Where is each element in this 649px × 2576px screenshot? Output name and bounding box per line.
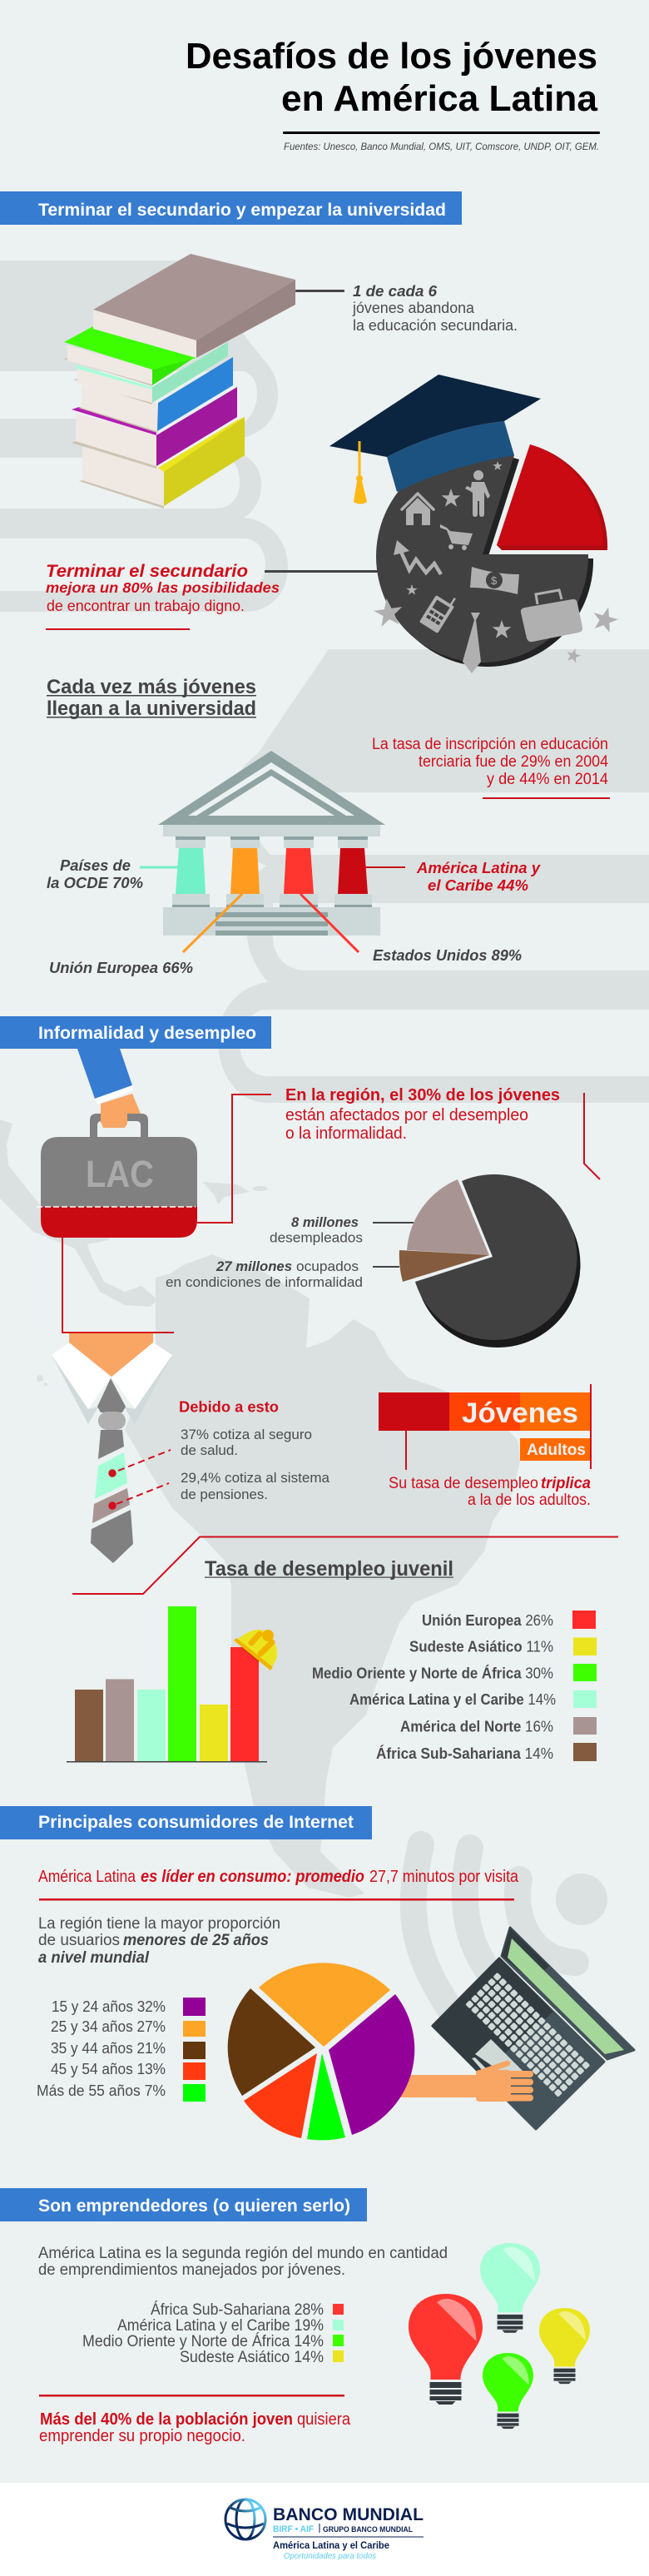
- icon: mint light bulb: [480, 2243, 540, 2333]
- icon: laptop: [433, 1928, 634, 2129]
- text: más del 40%: Más del 40% de la población joven: [40, 2410, 293, 2429]
- text: tasa de inscripción: terciaria fue de 29% en 2004: [419, 753, 608, 771]
- legend: edades: 25 y 34 años 27%: [51, 2018, 166, 2035]
- chart: jóvenes vs adultos: Jóvenes: [462, 1397, 578, 1429]
- heading: cada vez más jóvenes: Cada vez más jóvenes: [47, 676, 256, 698]
- column: América Latina y el Caribe: [338, 848, 368, 894]
- icon: yellow light bulb: [539, 2308, 590, 2384]
- text: mayor proporción: La región tiene la mayor proporción: [38, 1915, 280, 1933]
- label: 27 millones: en condiciones de informalidad: [166, 1274, 363, 1290]
- text: debido a esto: [179, 1398, 330, 1502]
- text: 1 de cada 6: jóvenes abandona: [352, 300, 475, 316]
- icon: hard hat: [234, 1630, 277, 1670]
- legend: emprendimientos: América Latina y el Caribe 19%: [117, 2317, 324, 2335]
- label: 27 millones: 27 millones: [216, 1258, 292, 1274]
- text: mayor proporción: menores de 25 años: [123, 1932, 269, 1949]
- text: tasa de inscripción: La tasa de inscripción en educación: [372, 736, 608, 753]
- text: segunda región: de emprendimientos manejados por jóvenes.: [38, 2261, 345, 2279]
- section header: emprendedores: Son emprendedores (o quieren serlo): [38, 2196, 350, 2216]
- text: segunda región: [38, 2245, 448, 2279]
- title: en América Latina: [281, 78, 598, 119]
- text: 30% de los jóvenes: [285, 1086, 560, 1143]
- legend: desempleo juvenil: [312, 1611, 597, 1762]
- section header: informalidad: Informalidad y desempleo: [38, 1024, 256, 1043]
- slice: 27 millones informalidad: [399, 1250, 489, 1282]
- callout: terminar el secundario: Terminar el secundario: [46, 562, 248, 581]
- legend: desempleo juvenil: Sudeste Asiático 11%: [409, 1638, 553, 1655]
- text: 30% de los jóvenes: o la informalidad.: [285, 1124, 407, 1143]
- legend: edades: 15 y 24 años 32%: [52, 1998, 166, 2015]
- text: segunda región: América Latina es la segunda región del mundo en cantidad: [38, 2245, 448, 2262]
- title: Desafíos de los jóvenes: [186, 36, 597, 77]
- label: Unión Europea: Unión Europea 66%: [49, 960, 193, 976]
- divider line to chart: [72, 1536, 618, 1594]
- background: wifi signal: [414, 1844, 607, 2014]
- heading: cada vez más jóvenes: llegan a la universidad: [47, 697, 256, 720]
- column: OCDE: [176, 848, 206, 894]
- arrow: line to 1 de cada 6: [295, 290, 344, 292]
- text: 1 de cada 6: la educación secundaria.: [353, 317, 518, 334]
- text: debido a esto: 29,4% cotiza al sistema: [181, 1470, 330, 1486]
- background: map of Latin America: [0, 1119, 520, 1898]
- text: debido a esto: Debido a esto: [179, 1398, 279, 1415]
- label: Estados Unidos: Estados Unidos 89%: [373, 947, 522, 964]
- heading: cada vez más jóvenes: [47, 676, 256, 720]
- slice: 25 y 34 años: [259, 1963, 390, 2047]
- text: debido a esto: de pensiones.: [181, 1487, 268, 1502]
- legend: edades: 45 y 54 años 13%: [51, 2061, 166, 2077]
- icon: phone: [419, 588, 458, 633]
- label: OCDE: [47, 857, 143, 891]
- heading: tasa de desempleo juvenil: Tasa de desempleo juvenil: [205, 1557, 453, 1581]
- text: más del 40%: quisiera: [297, 2410, 351, 2429]
- logo: Banco Mundial: [225, 2499, 424, 2561]
- logo: Banco Mundial: BANCO MUNDIAL: [273, 2505, 424, 2524]
- section header: secundario: [0, 191, 462, 225]
- text: 30% de los jóvenes: están afectados por el desempleo: [285, 1106, 528, 1124]
- slice: más de 55 años: [307, 2053, 345, 2140]
- text: más del 40%: emprender su propio negocio.: [39, 2427, 245, 2445]
- text: líder en consumo: 27,7 minutos por visita: [369, 1868, 519, 1886]
- legend: edades: 35 y 44 años 21%: [51, 2040, 166, 2057]
- callout: terminar el secundario: mejora un 80% las posibilidades: [46, 579, 280, 596]
- slice: 35 y 44 años: [228, 1988, 315, 2096]
- section header: secundario: Terminar el secundario y empezar la universidad: [38, 201, 446, 220]
- chart: jóvenes vs adultos: [379, 1384, 592, 1470]
- slice: 45 y 54 años: [244, 2053, 317, 2138]
- legend: desempleo juvenil: Medio Oriente y Norte de África 30%: [312, 1665, 553, 1681]
- text: triplica: Su tasa de desempleo: [389, 1475, 538, 1492]
- legend: desempleo juvenil: América del Norte 16%: [400, 1718, 553, 1735]
- legend: desempleo juvenil: América Latina y el Caribe 14%: [349, 1691, 556, 1708]
- text: debido a esto: 37% cotiza al seguro: [181, 1427, 312, 1442]
- slice: 8 millones desempleados: [407, 1179, 489, 1255]
- text: triplica: triplica: [541, 1475, 591, 1492]
- pie chart: edades: [228, 1963, 414, 2140]
- laptop base: [433, 1958, 604, 2129]
- icon: stack of books: [63, 254, 295, 509]
- callout: terminar el secundario: de encontrar un trabajo digno.: [47, 598, 245, 614]
- laptop lid: [502, 1928, 634, 2059]
- label: 27 millones: ocupados: [296, 1258, 359, 1274]
- icon: graduation cap band: [387, 421, 514, 492]
- slice: 15 y 24 años: [329, 1994, 414, 2135]
- label: América Latina y el Caribe: América Latina y: [416, 859, 542, 876]
- text: mayor proporción: [38, 1915, 280, 1967]
- background: book silhouettes middle: [218, 649, 649, 1103]
- text: 1 de cada 6: 1 de cada 6: [353, 283, 438, 300]
- icon: pie with graduation cap: [329, 375, 621, 673]
- text: triplica: [389, 1475, 591, 1509]
- background: book silhouettes top: [0, 261, 288, 612]
- legend: desempleo juvenil: Unión Europea 26%: [422, 1612, 553, 1629]
- icon: arm with LAC briefcase: LAC: [86, 1153, 154, 1195]
- column: Estados Unidos: [284, 848, 314, 894]
- legend: emprendimientos: Sudeste Asiático 14%: [180, 2349, 324, 2366]
- title: [186, 36, 600, 134]
- sources: Fuentes: Unesco, Banco Mundial, OMS, UIT, Comscore, UNDP, OIT, GEM.: [284, 142, 599, 152]
- logo: Banco Mundial: BIRF • AIF: [273, 2524, 314, 2534]
- icons inside pie: [373, 461, 621, 673]
- pie chart: desempleo: [399, 1174, 581, 1348]
- leader lines for columns: [140, 867, 405, 952]
- icon: globe: [225, 2499, 265, 2539]
- chart: jóvenes vs adultos: Adultos: [527, 1442, 586, 1459]
- logo: Banco Mundial: América Latina y el Caribe: [273, 2539, 389, 2551]
- icon: tassel: [354, 441, 367, 504]
- legend: emprendimientos: África Sub-Sahariana 28%: [151, 2301, 324, 2319]
- column: Unión Europea: [230, 848, 260, 894]
- text: más del 40%: [39, 2395, 351, 2445]
- text: 30% de los jóvenes: En la región, el 30% de los jóvenes: [285, 1086, 560, 1104]
- legend: edades: Más de 55 años 7%: [37, 2082, 166, 2099]
- label: 8 millones: [270, 1214, 414, 1245]
- icon: arm and hand: [399, 2063, 533, 2102]
- text: triplica: a la de los adultos.: [468, 1491, 591, 1509]
- label: América Latina y el Caribe: el Caribe 44%: [428, 876, 528, 894]
- bar chart: desempleo juvenil: [67, 1606, 277, 1763]
- section header: informalidad: [0, 1016, 271, 1049]
- legend: emprendimientos: Medio Oriente y Norte de África 14%: [82, 2333, 324, 2350]
- icon: graduation cap top: [329, 375, 541, 457]
- keyboard: [464, 1971, 592, 2098]
- icon: pie with graduation cap: $: [491, 574, 498, 587]
- label: 8 millones: 8 millones: [291, 1214, 359, 1230]
- label: América Latina y el Caribe: [416, 859, 542, 894]
- callout: terminar el secundario: [46, 562, 280, 630]
- icon: green light bulb: [483, 2353, 533, 2429]
- text: 1 de cada 6: [352, 283, 518, 334]
- legend: edades: [37, 1998, 206, 2102]
- label: 27 millones: [166, 1258, 399, 1290]
- text: tasa de inscripción: [372, 736, 610, 799]
- text: tasa de inscripción: y de 44% en 2014: [487, 771, 608, 788]
- legend: desempleo juvenil: África Sub-Sahariana 14%: [376, 1745, 553, 1762]
- section header: emprendedores: [0, 2188, 367, 2221]
- arrow: line to pie: [265, 570, 379, 573]
- text: líder en consumo: es líder en consumo: promedio: [141, 1868, 364, 1886]
- icon: university building: [158, 751, 385, 936]
- connector lines: [62, 1093, 600, 1333]
- section header: internet: Principales consumidores de Internet: [38, 1813, 354, 1832]
- label: 8 millones: desempleados: [270, 1230, 363, 1245]
- text: debido a esto: de salud.: [181, 1442, 238, 1458]
- legend: emprendimientos: [82, 2301, 344, 2366]
- logo: Banco Mundial: GRUPO BANCO MUNDIAL: [323, 2525, 413, 2534]
- text: mayor proporción: a nivel mundial: [38, 1949, 150, 1967]
- label: OCDE: la OCDE 70%: [47, 875, 143, 891]
- logo: Banco Mundial: Oportunidades para todos: [284, 2551, 377, 2561]
- text: líder en consumo: [38, 1868, 519, 1901]
- text: líder en consumo: América Latina: [38, 1868, 136, 1886]
- section header: internet: [0, 1806, 372, 1839]
- text: mayor proporción: de usuarios: [38, 1932, 120, 1949]
- icon: red light bulb: [409, 2294, 483, 2405]
- icon: arm with LAC briefcase: [37, 1049, 197, 1238]
- icon: shirt collar and tie: [52, 1333, 172, 1563]
- label: OCDE: Países de: [60, 857, 131, 874]
- slice: red wedge: [497, 444, 607, 550]
